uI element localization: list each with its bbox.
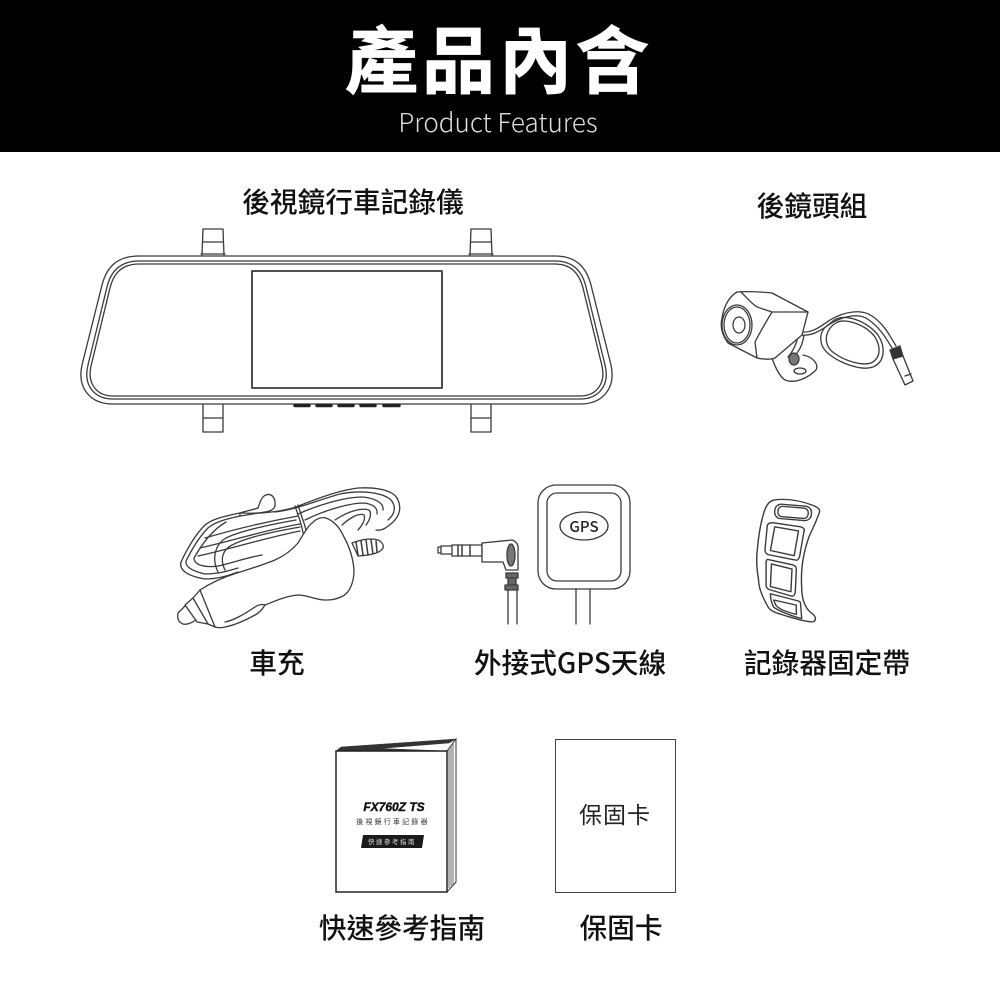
icon: GPS plug <box>438 540 518 624</box>
icon: warranty card: 保固卡 <box>579 796 651 830</box>
strain relief <box>352 539 383 556</box>
label: warranty card: 保固卡 <box>579 906 663 946</box>
label: external GPS antenna: 外接式GPS天線 <box>474 641 666 681</box>
booklet dark tag <box>361 835 424 848</box>
coil lines <box>181 513 240 579</box>
booklet model name: FX760Z TS <box>363 800 425 814</box>
plug on cable <box>240 494 275 516</box>
icon: quick guide booklet: 快速參考指南 <box>368 836 416 846</box>
title: 產品內含 <box>345 3 653 109</box>
label: rear camera: 後鏡頭組 <box>757 184 867 224</box>
charger body <box>200 518 354 628</box>
booklet subtitle: 後視鏡行車記錄器 <box>356 817 430 827</box>
coil tie band <box>295 505 306 533</box>
icon: recorder strap <box>757 499 820 622</box>
header band <box>0 0 1000 152</box>
icon: rear-view mirror dash cam <box>81 229 612 432</box>
label: recorder strap: 記錄器固定帶 <box>744 641 910 681</box>
label: quick guide: 快速參考指南 <box>319 906 485 946</box>
icon: car charger <box>178 488 400 628</box>
icon: rear camera <box>721 292 913 385</box>
icon: warranty card <box>556 740 676 892</box>
subtitle: Product Features <box>398 103 598 140</box>
label: mirror recorder: 後視鏡行車記錄儀 <box>242 180 464 220</box>
icon: GPS antenna: GPS <box>569 516 599 537</box>
label: car charger: 車充 <box>249 641 305 681</box>
icon: GPS antenna <box>538 485 630 624</box>
icon: quick guide booklet <box>336 739 456 892</box>
